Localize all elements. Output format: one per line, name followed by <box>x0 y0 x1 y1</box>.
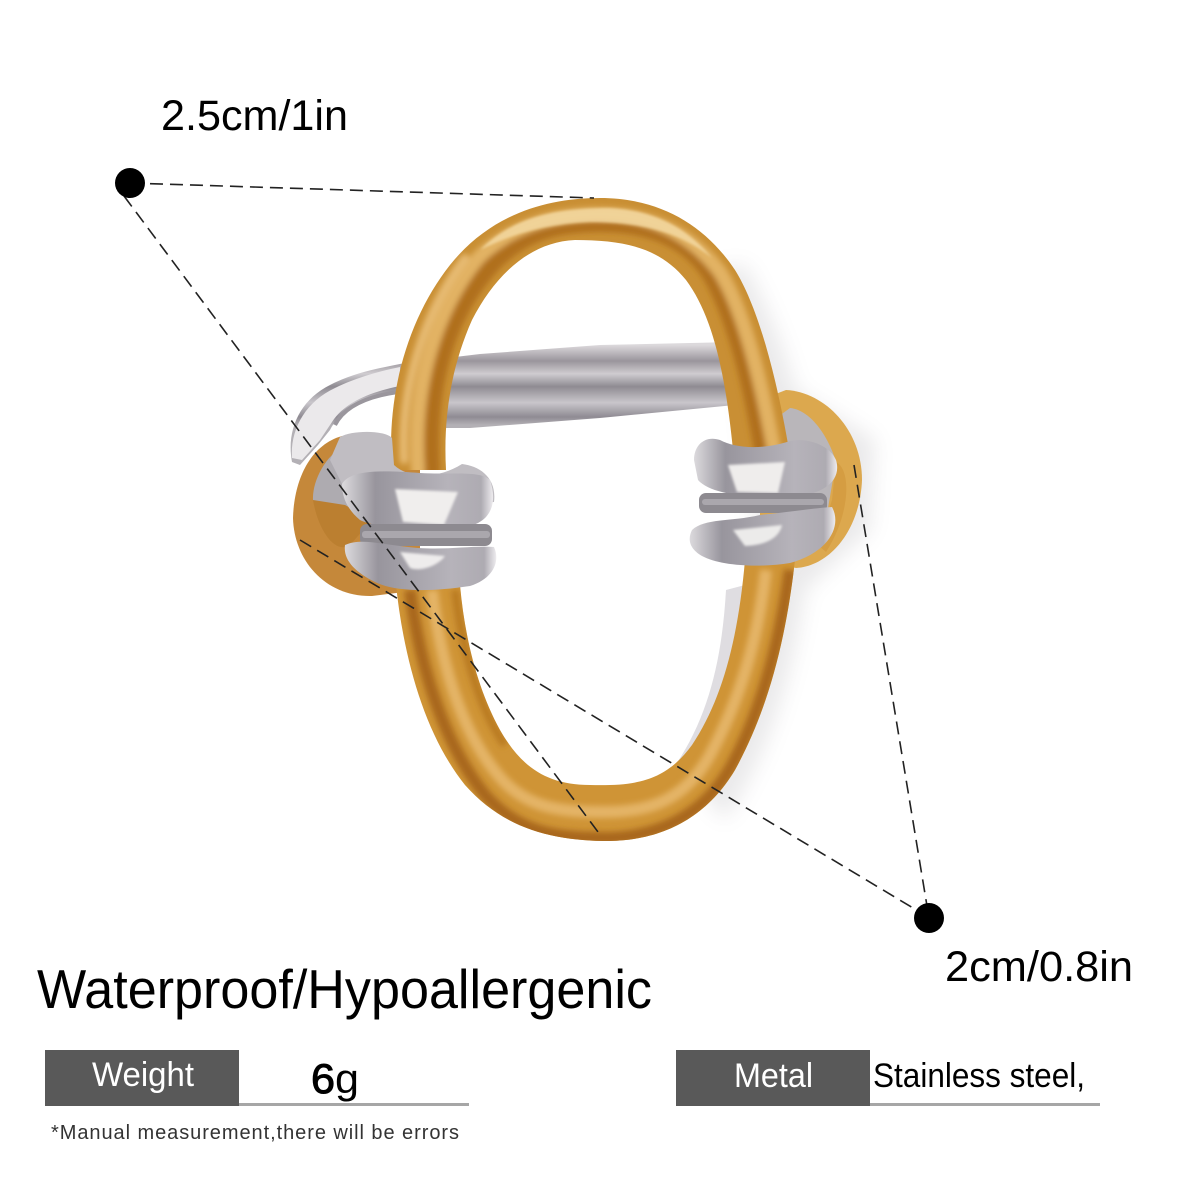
heading: Waterproof/Hypoallergenic <box>37 958 652 1020</box>
height label: 2cm/0.8in <box>945 943 1133 991</box>
gold disc right <box>760 390 862 568</box>
metal row: Stainless steel, <box>873 1057 1085 1095</box>
weight row: Weight <box>92 1056 195 1094</box>
silver band <box>291 342 745 770</box>
left knot <box>330 432 496 590</box>
gold disc left <box>293 436 420 596</box>
lower gold arc <box>396 562 795 841</box>
soft shadow <box>700 265 875 820</box>
upper gold arc <box>391 198 788 470</box>
metal row <box>676 1050 1100 1106</box>
knot cap <box>330 432 494 510</box>
ring illustration <box>291 190 875 850</box>
weight row <box>45 1050 469 1106</box>
product infographic <box>37 99 1130 1142</box>
metal row: Metal <box>734 1057 813 1095</box>
measurement note: *Manual measurement,there will be errors <box>51 1122 459 1144</box>
measurement dot top left <box>115 168 145 198</box>
measurement dot bottom right <box>914 903 944 933</box>
dashed measurement lines <box>124 183 929 918</box>
width label: 2.5cm/1in <box>161 92 348 140</box>
weight row: 6g <box>311 1055 359 1102</box>
right knot <box>690 439 837 566</box>
silver inside of discs <box>313 440 400 547</box>
